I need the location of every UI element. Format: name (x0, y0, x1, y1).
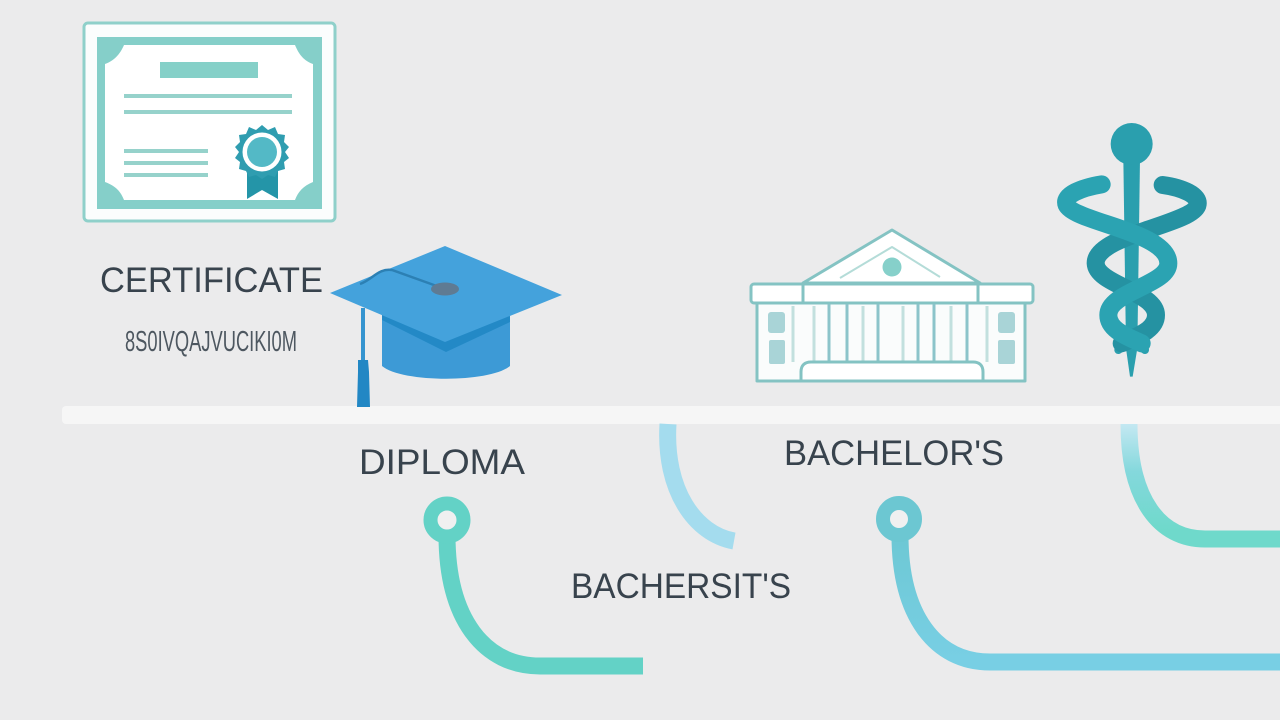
icon: university building (751, 230, 1033, 381)
garbled caption under certificate: 8S0IVQAJVUCIKI0M (125, 326, 297, 358)
building pediment (803, 230, 980, 283)
caduceus snake right strand (1096, 185, 1198, 343)
building body (757, 303, 1025, 381)
label: bachersit's: BACHERSIT'S (571, 567, 791, 606)
label: diploma: DIPLOMA (359, 443, 526, 482)
caduceus lower prongs (1118, 343, 1145, 350)
icon: certificate (84, 23, 335, 221)
certificate title bar (160, 62, 258, 78)
certificate outer frame (84, 23, 335, 221)
label: bachelor's: BACHELOR'S (784, 434, 1004, 473)
cornice dividers (803, 284, 978, 303)
building windows (768, 312, 1015, 364)
caduceus orb (1111, 123, 1153, 165)
heading: certificate: CERTIFICATE (100, 261, 323, 300)
certificate teal border (97, 37, 322, 209)
building steps (801, 362, 983, 381)
cap string (360, 270, 445, 289)
caduceus snake left strand (1066, 184, 1168, 343)
icon: caduceus (1066, 123, 1198, 377)
certificate text lines (124, 94, 292, 177)
connector: right curve (1129, 424, 1280, 539)
caduceus staff (1123, 158, 1140, 377)
pediment medallion (882, 258, 902, 276)
tassel (357, 308, 370, 407)
pediment inner lines (840, 247, 940, 278)
connector: bachelor pin (883, 503, 1280, 662)
cap shadow under board (382, 312, 510, 352)
cap base (382, 312, 510, 379)
cap button (431, 282, 459, 296)
building columns (793, 304, 987, 362)
icon: ribbon seal (235, 125, 289, 199)
connector: light blue curve (668, 424, 734, 541)
cap board (330, 246, 562, 342)
building cornice (751, 284, 1033, 303)
icon: graduation cap (330, 246, 562, 407)
timeline bar (62, 406, 1280, 424)
connector: diploma pin (430, 504, 643, 666)
certificate paper (105, 45, 313, 200)
